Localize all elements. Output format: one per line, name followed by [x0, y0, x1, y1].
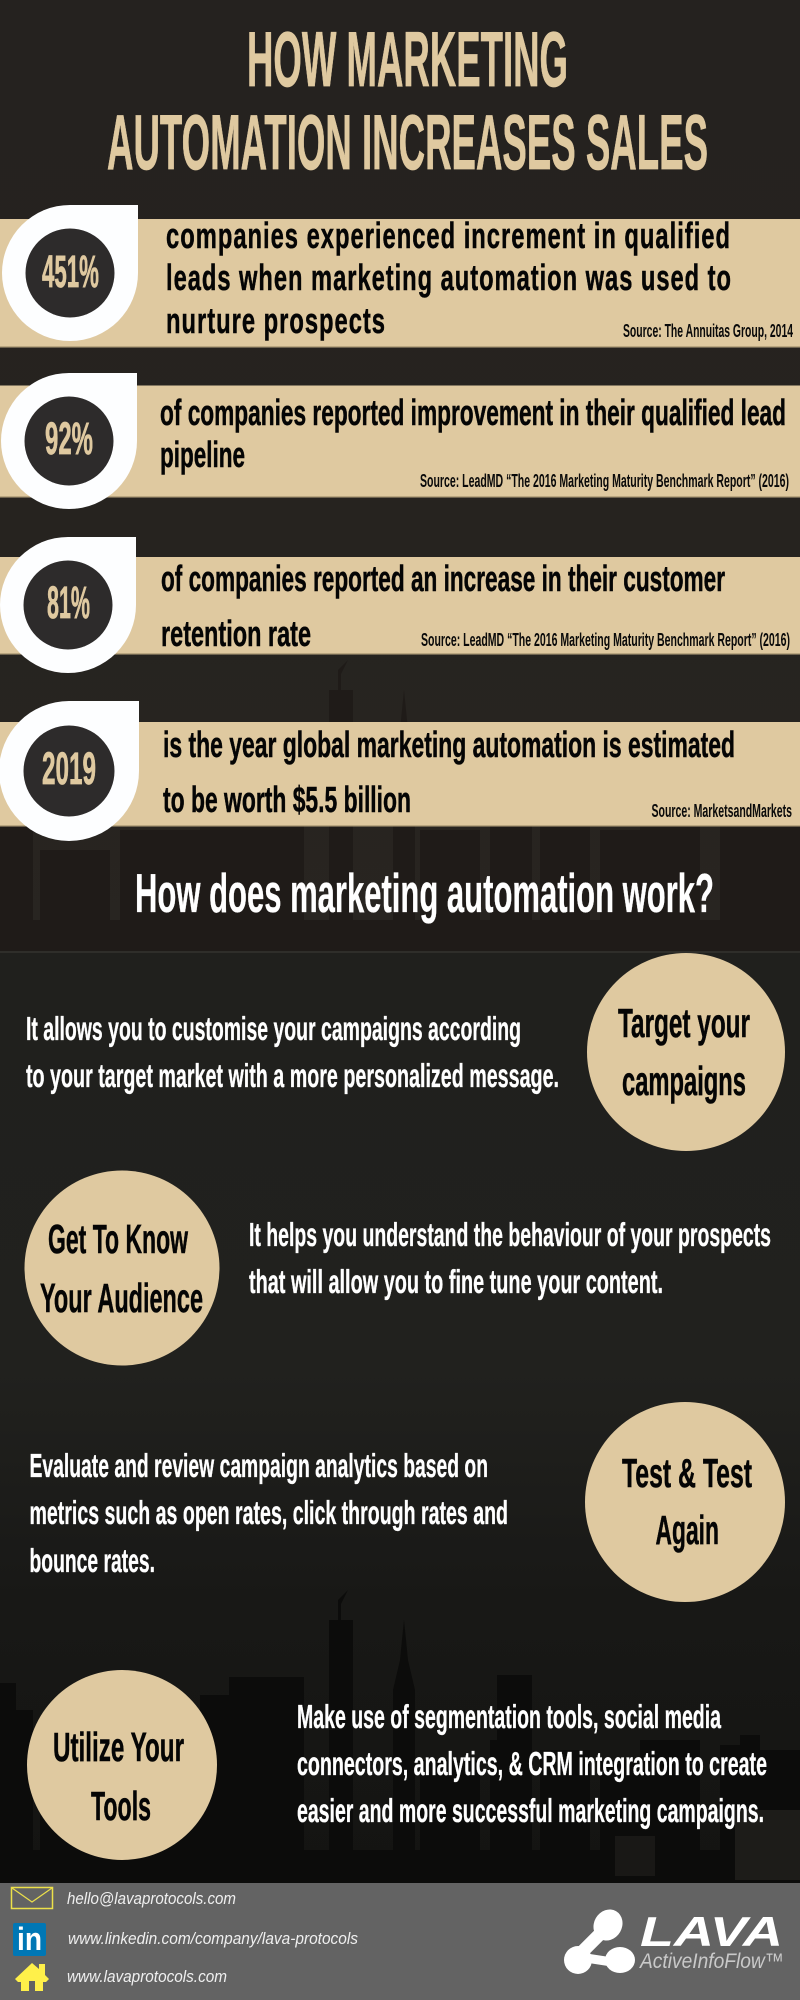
text: stat 451% description [166, 215, 732, 341]
text: stat 92% description: pipeline [160, 434, 245, 475]
panel: stat 92% [0, 373, 800, 509]
logo tagline: ActiveInfoFlow™ [638, 1950, 784, 1973]
icon: envelope [12, 1888, 52, 1908]
panel: utilize your tools [27, 1670, 767, 1860]
text: target description [26, 1010, 559, 1094]
badge: utilize your tools [27, 1670, 217, 1860]
text: stat 81% description: retention rate [161, 613, 311, 654]
text: test description: bounce rates. [30, 1542, 155, 1579]
badge: utilize your tools: Tools [91, 1783, 151, 1829]
text: test description [30, 1447, 508, 1579]
icon: teardrop badge 451%: 451% [42, 246, 99, 297]
background: upper section [0, 0, 800, 953]
icon: linkedin: in [17, 1921, 42, 1957]
badge: test and test again: Again [656, 1507, 719, 1553]
panel: test and test again [30, 1402, 785, 1602]
panel: stat 451% [0, 205, 800, 348]
text: stat 2019 description: to be worth $5.5 billion [163, 779, 411, 820]
icon: logo mark [564, 1904, 635, 1974]
contact: email: hello@lavaprotocols.com [67, 1889, 236, 1908]
icon: teardrop badge 451% [2, 205, 138, 341]
icon: teardrop badge 2019: 2019 [42, 743, 96, 794]
text: stat 81% description [161, 558, 725, 654]
icon: teardrop badge 2019 [0, 701, 139, 841]
logo wordmark: LAVA [640, 1908, 783, 1955]
text: stat 451% description: nurture prospects [166, 300, 386, 341]
badge: get to know your audience: Get To Know [48, 1216, 188, 1262]
icon: teardrop badge 92%: 92% [45, 413, 93, 464]
text: tools description [297, 1698, 767, 1829]
panel: stat 81% [0, 537, 800, 673]
contact: linkedin: www.linkedin.com/company/lava-protocols [68, 1929, 358, 1948]
badge: target your campaigns [587, 953, 785, 1151]
title [107, 15, 708, 186]
text: stat 92% description [160, 392, 786, 475]
panel: stat 2019 [0, 701, 800, 841]
icon: teardrop badge 81% [0, 537, 136, 673]
logo: LAVA ActiveInfoFlow [564, 1904, 784, 1974]
panel: get to know your audience [24, 1170, 771, 1366]
contact: website: www.lavaprotocols.com [67, 1967, 227, 1986]
text: stat 2019 description [163, 724, 735, 820]
badge: get to know your audience [24, 1170, 220, 1366]
badge: get to know your audience: Your Audience [40, 1275, 203, 1321]
icon: house [15, 1963, 49, 1991]
text: test description: Evaluate and review campaign analytics based on [30, 1447, 488, 1484]
badge: utilize your tools: Utilize Your [53, 1724, 184, 1770]
text: audience description [249, 1216, 771, 1300]
icon: teardrop badge 92% [1, 373, 137, 509]
icon: teardrop badge 81%: 81% [47, 577, 90, 628]
background: lower section [0, 953, 800, 1883]
footer bar [0, 1883, 800, 2000]
panel: target your campaigns [26, 953, 785, 1151]
badge: test and test again [585, 1402, 785, 1602]
